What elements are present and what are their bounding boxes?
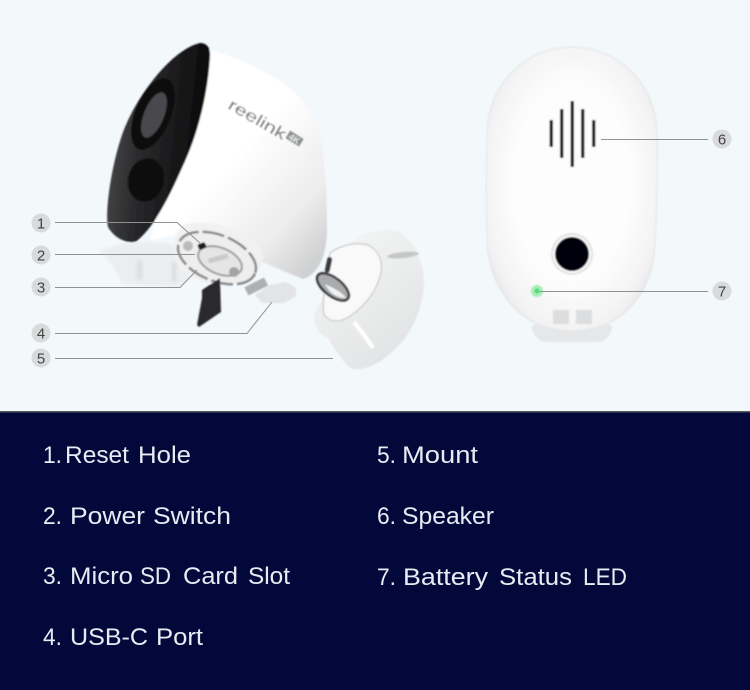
flap: rubber cover — [99, 242, 198, 287]
back view of device — [486, 47, 657, 342]
legend item 6: Speaker — [402, 503, 494, 530]
4K badge — [285, 130, 304, 147]
flap: USB-C cover — [255, 282, 296, 303]
legend item 2 — [43, 503, 231, 530]
legend item 3: Micro — [70, 563, 133, 590]
marker 1 — [32, 214, 50, 232]
legend item 4: USB-C — [70, 624, 148, 651]
marker 6 — [712, 130, 732, 148]
legend item 1 — [43, 442, 191, 469]
legend panel — [0, 411, 750, 690]
legend item 7 — [377, 564, 627, 591]
legend item 2: Switch — [153, 503, 231, 530]
brand text: reelink — [225, 97, 290, 144]
legend item 4 — [43, 624, 203, 651]
legend item 7: LED — [583, 564, 627, 591]
mount ball joint — [312, 257, 354, 306]
marker 5: 5 — [37, 350, 45, 368]
legend item 5 — [377, 442, 478, 469]
legend item 7: 7. — [377, 564, 396, 591]
marker 7: 7 — [718, 284, 726, 300]
legend item 7: Status — [499, 564, 572, 591]
legend item 5: 5. — [377, 442, 396, 469]
legend item 3: 3. — [43, 563, 62, 590]
camera black face — [107, 43, 210, 242]
legend item 2: 2. — [43, 503, 62, 530]
motion sensor — [123, 154, 169, 206]
device clip base — [532, 325, 612, 342]
legend item 4: Port — [156, 624, 203, 651]
marker 4: 4 — [37, 326, 45, 342]
legend item 1: Reset — [65, 442, 129, 469]
mount collar — [323, 244, 381, 321]
legend item 3: Card — [183, 563, 238, 590]
legend item 7: Battery — [403, 564, 488, 591]
legend item 2: Power — [70, 503, 145, 530]
device back shell — [486, 47, 657, 331]
marker 3 — [32, 278, 50, 296]
legend item 3: SD — [140, 563, 171, 590]
camera illustration — [99, 43, 424, 369]
background — [0, 0, 750, 411]
icon: micro SD card — [197, 278, 221, 327]
camera lens — [122, 72, 184, 156]
battery LED — [531, 285, 543, 297]
mount — [312, 230, 424, 369]
mount hole — [551, 233, 593, 275]
legend item 3: Slot — [248, 563, 290, 590]
marker 2: 2 — [37, 248, 45, 264]
legend item 3 — [43, 563, 290, 590]
legend item 6: 6. — [377, 503, 396, 530]
marker 5 — [32, 348, 50, 368]
camera white body — [150, 48, 327, 279]
marker 6: 6 — [718, 132, 726, 148]
legend item 4: 4. — [43, 624, 62, 651]
legend item 1: Hole — [138, 442, 191, 469]
speaker slots — [550, 101, 596, 167]
4K badge: 4K — [287, 132, 302, 146]
marker 7 — [712, 282, 732, 300]
bottom plate — [170, 221, 268, 295]
legend item 1: 1. — [43, 442, 62, 469]
marker 3: 3 — [37, 280, 45, 296]
legend item 5: Mount — [402, 442, 478, 469]
marker 4 — [32, 324, 50, 342]
leader lines — [55, 140, 708, 358]
marker 1: 1 — [37, 216, 45, 232]
clip tabs — [553, 310, 592, 324]
marker 2 — [32, 246, 50, 264]
